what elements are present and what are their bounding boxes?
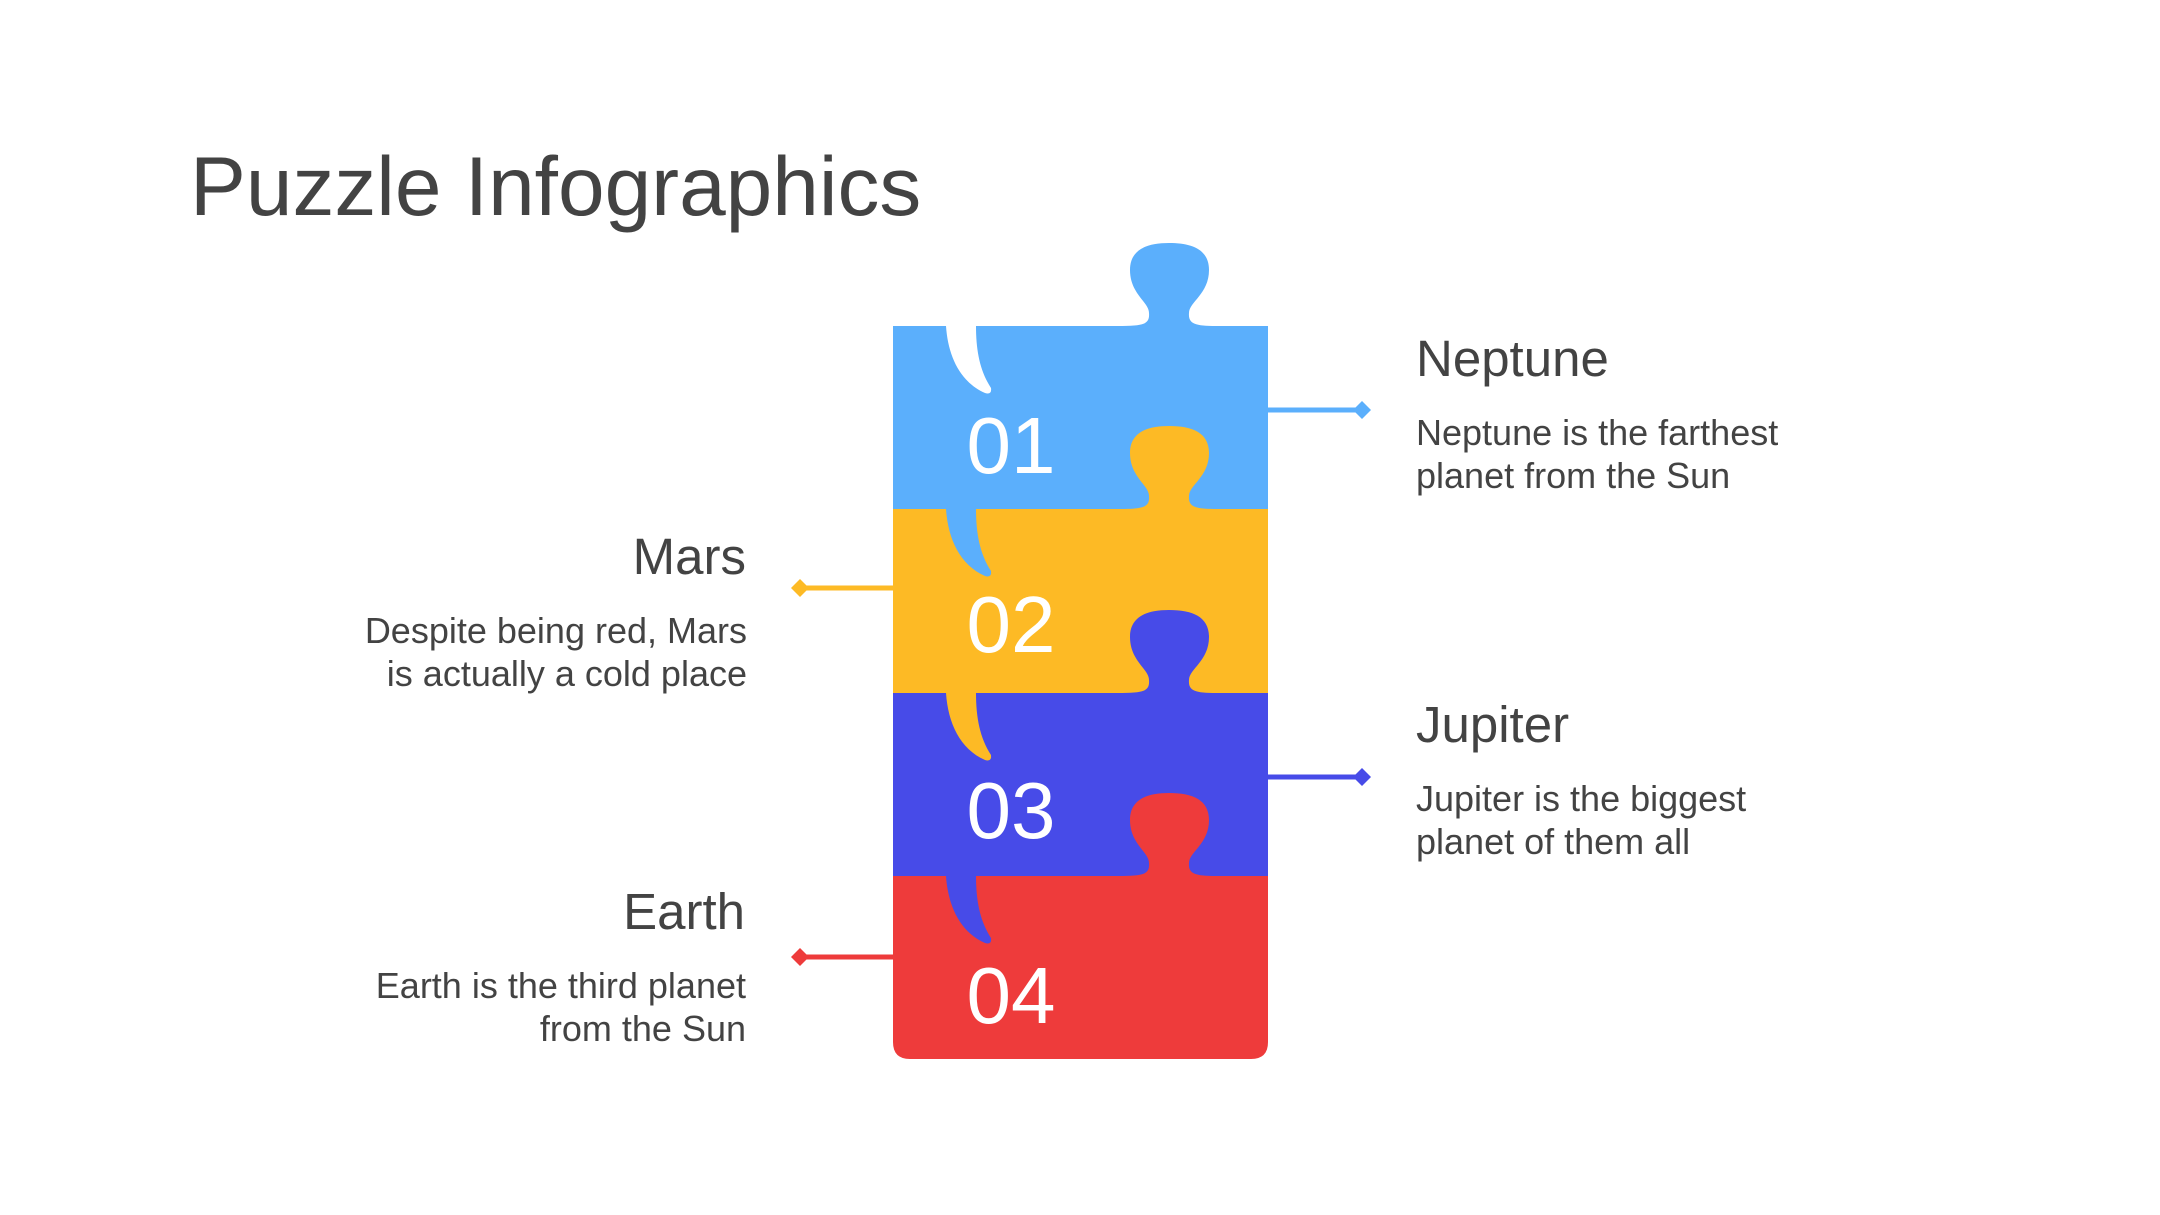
- text block: Neptune: Neptune: [1416, 330, 1609, 387]
- text block: Mars: is actually a cold place: [387, 653, 747, 694]
- text block: Earth: from the Sun: [540, 1008, 746, 1049]
- piece 01: Neptune: [893, 243, 1268, 510]
- text block: Jupiter: Jupiter: [1416, 696, 1569, 753]
- text block: Earth: Earth is the third planet: [376, 965, 746, 1006]
- piece 02: Mars: 02: [966, 580, 1055, 669]
- piece 04: Earth: 04: [966, 951, 1055, 1040]
- piece 01: Neptune: 01: [966, 401, 1055, 490]
- piece 03: Jupiter: 03: [966, 766, 1055, 855]
- text block: Neptune: planet from the Sun: [1416, 455, 1730, 496]
- connector: Mars: [791, 579, 893, 597]
- piece 03: Jupiter: [893, 610, 1268, 877]
- piece 04: Earth: [893, 793, 1268, 1059]
- piece 02: Mars: [893, 426, 1268, 694]
- text block: Earth: Earth: [623, 883, 745, 940]
- text block: Mars: Mars: [633, 528, 746, 585]
- puzzle stack: [893, 243, 1268, 1059]
- text block: Jupiter: Jupiter is the biggest: [1416, 778, 1746, 819]
- connector: Neptune: [1268, 401, 1371, 419]
- text block: Jupiter: planet of them all: [1416, 821, 1690, 862]
- title: Puzzle Infographics: [190, 139, 921, 233]
- text block: Jupiter: [1416, 696, 1746, 862]
- connector: Earth: [791, 948, 893, 966]
- text block: Mars: [365, 528, 747, 694]
- text block: Neptune: [1416, 330, 1778, 496]
- text block: Earth: [376, 883, 746, 1049]
- text block: Neptune: Neptune is the farthest: [1416, 412, 1778, 453]
- connector: Jupiter: [1268, 768, 1371, 786]
- text block: Mars: Despite being red, Mars: [365, 610, 747, 651]
